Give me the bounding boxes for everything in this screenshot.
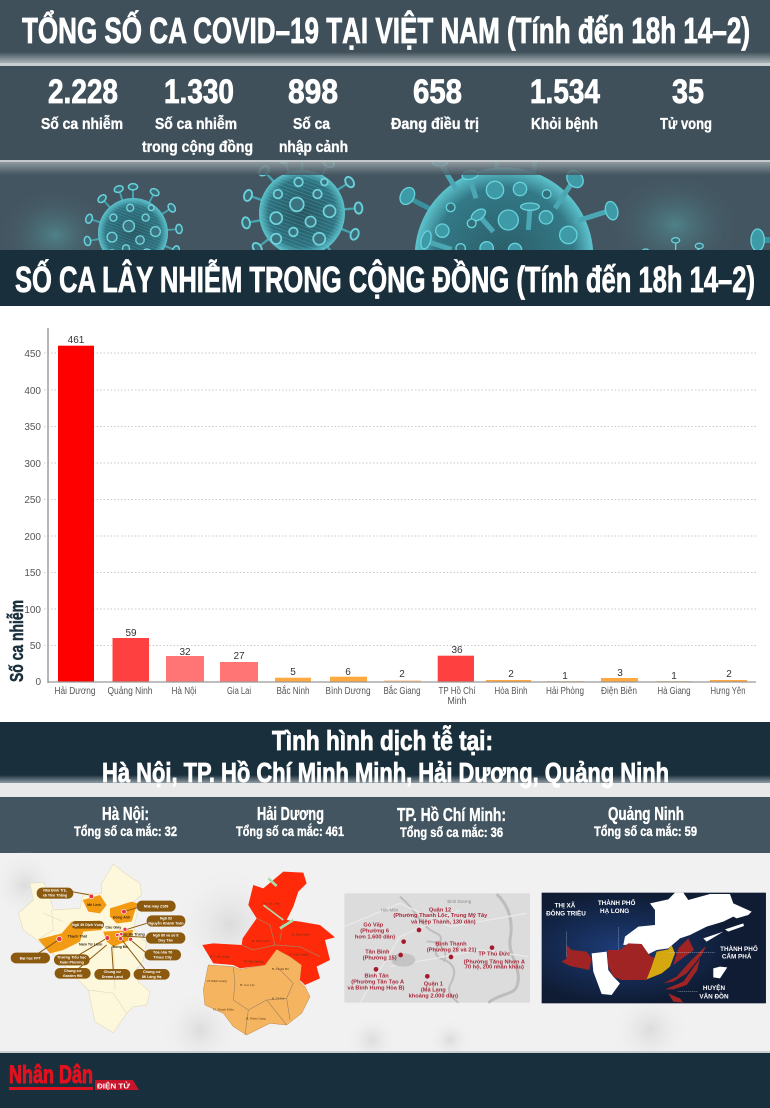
yellow district — [647, 945, 675, 979]
chart grid lines — [44, 353, 756, 646]
stat: infected — [41, 73, 123, 133]
map labels — [546, 897, 758, 1001]
location labels — [11, 888, 185, 980]
map labels: HẠ LONG — [600, 908, 629, 915]
district names: H. Thanh Hà — [272, 967, 289, 971]
district names: Thạch Thất — [68, 934, 88, 938]
y axis tick labels: 300 — [24, 459, 41, 470]
stat: community cases: 1.330 — [164, 73, 234, 111]
map labels: VÂN ĐỒN — [699, 991, 729, 1001]
bar value labels: 2 — [399, 669, 405, 680]
total: TP. Hồ Chí Minh: TP. Hồ Chí Minh: — [397, 805, 506, 825]
y axis tick labels: 450 — [24, 349, 41, 360]
stat: imported cases: 898 — [288, 73, 338, 111]
district names — [68, 903, 145, 949]
location labels: Xuân Phương — [59, 960, 84, 964]
category labels: Hải Dương — [54, 686, 96, 697]
stat: under treatment: Đang điều trị — [391, 116, 479, 133]
location labels: Chung cư — [143, 970, 161, 974]
district names: Nam Từ Liêm — [79, 943, 103, 947]
panel: national statistics — [0, 66, 770, 160]
bar value labels: 36 — [451, 645, 463, 656]
location labels: Nguyễn Khánh Toàn — [148, 921, 184, 925]
bar value labels: 5 — [290, 667, 296, 678]
location labels: 86 Láng Hạ — [142, 975, 162, 979]
location labels: Nhà Đình Trệ, — [43, 889, 67, 893]
district names: Cầu Giấy — [105, 926, 122, 930]
stat: infected: 2.228 — [48, 73, 118, 111]
map: Hải Dương — [202, 872, 335, 1035]
location notes: (Phường 28 và 21) — [427, 948, 477, 954]
map labels: CẨM PHẢ — [722, 952, 752, 961]
category labels: Hà Giang — [658, 686, 690, 697]
map labels: ĐÔNG TRIỀU — [546, 907, 586, 917]
y axis tick labels — [24, 349, 41, 688]
bar value labels: 59 — [125, 628, 137, 639]
location notes: và Bình Hưng Hòa B) — [348, 986, 405, 992]
bar value labels: 1 — [671, 671, 677, 682]
total: TP. Hồ Chí Minh: Tổng số ca mắc: 36 — [400, 823, 503, 840]
axes — [48, 328, 756, 683]
bar value labels: 2 — [508, 669, 514, 680]
icon: tiny virus tips — [643, 238, 703, 252]
panel: maps background — [0, 851, 770, 1070]
category labels: Hòa Bình — [494, 686, 528, 697]
location notes: (Phường Thanh Lộc, Trung Mỹ Tây — [393, 913, 488, 919]
district names: Hai Bà Trưng — [122, 933, 145, 937]
y axis tick labels: 100 — [24, 605, 41, 616]
total: Quảng Ninh — [594, 804, 697, 839]
location notes: Tân Bình — [365, 949, 390, 955]
heading: epidemiological situation: Tình hình dịch tễ tại: — [272, 725, 493, 756]
logo: Nhân Dân Điện tử: Nhân Dân — [9, 1061, 93, 1089]
total: Hà Nội — [74, 804, 177, 839]
bar value labels: 2 — [726, 669, 732, 680]
location labels: Tòa nhà T6 — [153, 950, 172, 954]
total: Hải Dương — [236, 804, 344, 839]
district names: H. Chí Linh — [263, 901, 280, 905]
stat: community cases: Số ca nhiễm — [155, 114, 237, 133]
header: total cases title — [0, 0, 770, 66]
location labels: Nhà máy Z168 — [144, 905, 168, 909]
stat: deaths — [660, 73, 712, 133]
location notes: TP Thủ Đức — [478, 952, 510, 958]
bars — [58, 346, 747, 682]
map labels: THÀNH PHỐ — [598, 897, 636, 907]
location notes: Bình Tân — [365, 974, 389, 980]
location notes — [348, 907, 525, 1000]
district names: Đống Đa — [112, 945, 128, 949]
total: Hải Dương: Hải Dương — [257, 804, 324, 824]
y axis title: Số ca nhiễm — [6, 600, 27, 682]
y axis tick labels: 400 — [24, 386, 41, 397]
stat: recovered: 1.534 — [530, 73, 600, 111]
stat: infected: Số ca nhiễm — [41, 114, 123, 133]
category labels: Hải Phòng — [546, 686, 584, 697]
total: Hà Nội: Tổng số ca mắc: 32 — [74, 822, 177, 839]
stat: imported cases: nhập cảnh — [279, 139, 348, 156]
leader lines — [33, 892, 147, 972]
y axis tick labels: 200 — [24, 532, 41, 543]
total: Hải Dương: Tổng số ca mắc: 461 — [236, 822, 344, 839]
stat: imported cases: Số ca — [293, 116, 330, 133]
location labels: Ngõ 49 Dịch Vọng — [72, 923, 103, 927]
bar value labels: 1 — [562, 671, 568, 682]
location labels: Duy Tân — [158, 938, 173, 942]
location notes: 70 hộ, 200 nhân khẩu) — [465, 964, 524, 971]
district names: Đông Anh — [113, 915, 130, 919]
white districts — [592, 893, 752, 995]
icon: medium virus — [241, 162, 364, 250]
location labels: Times City — [153, 955, 173, 959]
location notes: (Phường 6 — [360, 928, 389, 934]
y axis tick labels: 250 — [24, 495, 41, 506]
location notes: (Phường Tăng Nhơn A — [464, 959, 525, 965]
red districts — [562, 938, 706, 1003]
stat: deaths: Tử vong — [660, 116, 712, 133]
category labels: Hưng Yên — [710, 686, 746, 697]
y axis tick labels: 50 — [30, 641, 41, 652]
location notes: Quận 1 — [424, 982, 443, 988]
category labels: Minh — [448, 696, 466, 707]
category labels: Bình Dương — [326, 686, 370, 697]
location pins — [57, 894, 133, 942]
district names: Mê Linh — [87, 903, 101, 907]
district names: H. Bình Giang — [207, 979, 227, 983]
total: Quảng Ninh: Quảng Ninh — [608, 804, 684, 824]
location notes: và Hiệp Thành, 130 dân) — [411, 919, 476, 925]
stat: deaths: 35 — [672, 73, 704, 111]
panel: virus image band — [0, 160, 770, 250]
y axis tick labels: 0 — [35, 677, 41, 688]
stat: imported cases — [279, 73, 348, 156]
category labels: Bắc Ninh — [276, 684, 310, 697]
location notes: khoảng 2.000 dân) — [409, 994, 458, 1000]
bar value labels: 461 — [68, 335, 85, 346]
district names: H. Kinh Môn — [292, 932, 310, 936]
location notes: (Phường 15) — [363, 955, 397, 961]
location labels: Trường Tiểu học — [57, 955, 86, 959]
stat: under treatment: 658 — [413, 73, 462, 111]
orange districts — [38, 895, 137, 953]
bar value labels: 6 — [345, 667, 351, 678]
location labels: Dream Land — [102, 975, 123, 979]
bar value labels: 32 — [179, 647, 191, 658]
district borders and rivers — [233, 918, 320, 1035]
district names: H. Gia Lộc — [240, 983, 255, 987]
district names — [207, 901, 310, 1020]
location notes: (Phường Tân Tạo A — [351, 980, 404, 986]
map: Hà Nội — [11, 864, 185, 1033]
bar chart: community cases by province — [6, 328, 756, 707]
category labels: Quảng Ninh — [108, 686, 152, 697]
rivers and roads — [344, 894, 528, 1003]
district names: H. Cẩm Giàng — [210, 953, 230, 958]
y axis tick labels: 150 — [24, 568, 41, 579]
location labels: Đại học FPT — [20, 956, 42, 960]
total: Hà Nội: Hà Nội: — [102, 804, 149, 824]
location labels: xã Tiền Thắng — [43, 893, 67, 898]
logo: Nhân Dân Điện tử: ĐIỆN TỬ — [97, 1082, 131, 1090]
district names: H. Ninh Giang — [246, 1016, 266, 1020]
bar value labels: 27 — [233, 651, 245, 662]
map: Quảng Ninh — [542, 893, 766, 1003]
category labels: Hà Nội — [172, 686, 196, 697]
location dots — [374, 928, 494, 979]
location notes: Gò Vấp — [363, 922, 384, 929]
stat: community cases — [142, 73, 253, 156]
icon: large virus — [399, 162, 619, 250]
stat: community cases: trong cộng đồng — [142, 139, 253, 156]
map: TP. Hồ Chí Minh: Hóc Môn — [381, 907, 399, 912]
annotation lines — [567, 927, 715, 991]
map labels: THÀNH PHỐ — [720, 943, 758, 953]
icon: small virus — [84, 182, 183, 250]
footer — [0, 1053, 770, 1108]
map: TP. Hồ Chí Minh — [344, 893, 530, 1003]
district names: TP. Hải Dương — [243, 960, 264, 964]
location labels: Chung cư — [64, 969, 82, 973]
district names: H. Thanh Miện — [213, 1008, 234, 1012]
panel: province totals — [0, 797, 770, 853]
district names: H. Kim Thành — [289, 952, 309, 956]
total: Quảng Ninh: Tổng số ca mắc: 59 — [594, 822, 697, 839]
district names: H. Tứ Kỳ — [272, 996, 285, 1000]
stat: recovered — [530, 73, 600, 133]
bar value labels — [68, 335, 732, 682]
total: TP. Hồ Chí Minh — [397, 805, 506, 840]
location labels: Garden Hill — [63, 974, 82, 978]
category labels: Bắc Giang — [384, 684, 420, 697]
location labels: Ngõ 80 và số 8 — [153, 933, 178, 937]
location labels: Chung cư — [104, 970, 121, 974]
location notes: (Mả Lạng — [421, 988, 446, 994]
district names: H. Nam Sách — [252, 939, 270, 943]
category labels: TP Hồ Chí — [438, 685, 476, 697]
category labels: Gia Lai — [227, 686, 251, 697]
category labels: Điện Biên — [601, 686, 637, 697]
location labels: Ngõ 92 — [160, 916, 172, 920]
location notes: Bình Thạnh — [435, 942, 467, 948]
location notes: Quận 12 — [429, 907, 451, 913]
bar value labels: 3 — [617, 668, 623, 679]
stat: recovered: Khỏi bệnh — [531, 116, 598, 133]
category labels — [54, 684, 746, 707]
stat: under treatment — [391, 73, 479, 133]
location notes: hơn 1.600 dân) — [355, 934, 395, 940]
y axis tick labels: 350 — [24, 422, 41, 433]
map labels: HUYỆN — [703, 983, 725, 992]
map: TP. Hồ Chí Minh: Bình Dương — [447, 899, 472, 904]
map labels: THỊ XÃ — [555, 900, 576, 909]
heading: epidemiological situation — [0, 722, 770, 797]
icon: virus head at right edge — [751, 229, 770, 251]
